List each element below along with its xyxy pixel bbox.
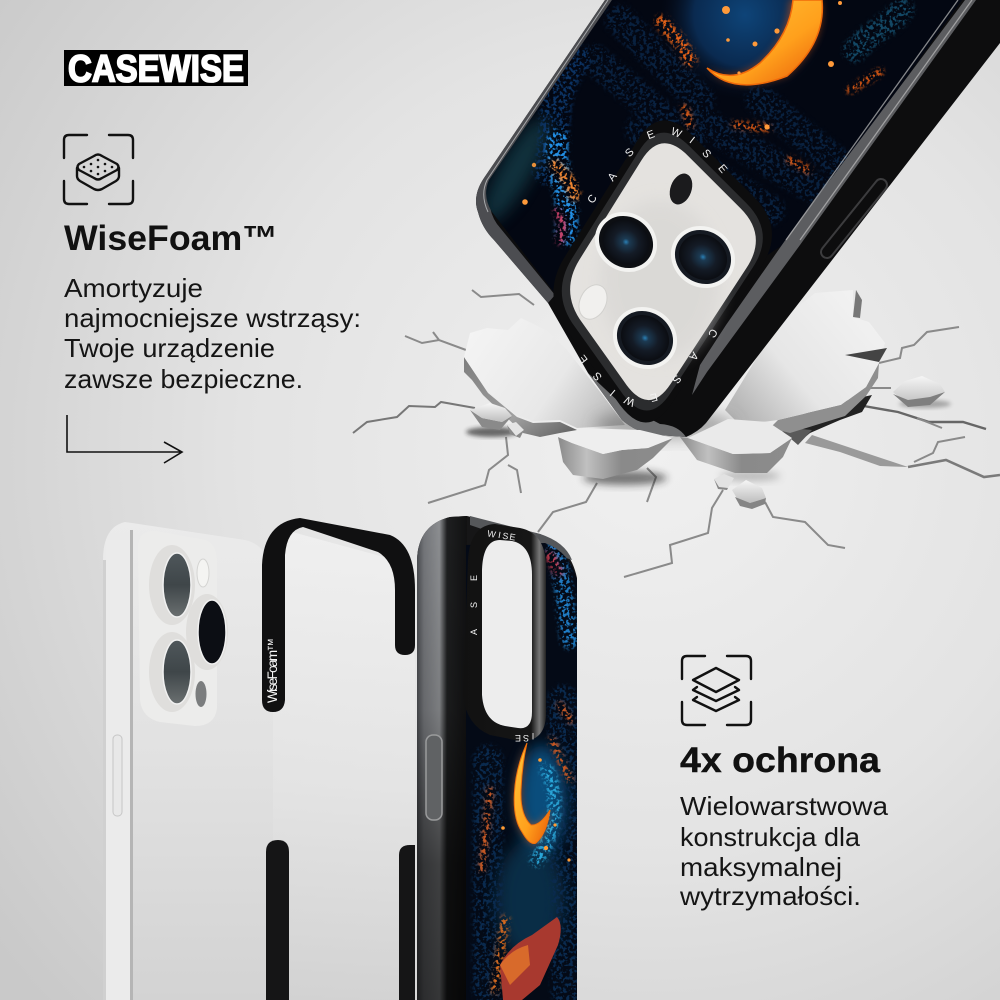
stars [501,758,571,862]
bezel lettering: A [606,170,620,184]
camera plateau [570,143,756,400]
ring lettering: I [532,731,534,741]
blue nebula [518,745,566,855]
lower bumper right [399,845,415,1000]
lens 2 [659,213,747,301]
side button [113,735,122,816]
heading: 4x ochrona: 4x ochrona [680,741,881,780]
side button [426,735,442,820]
teal glow [486,114,554,223]
ring lettering: S [469,602,479,608]
figure light [500,945,530,985]
flash [574,280,612,324]
ring lettering [469,528,534,743]
night sky [670,0,792,90]
bottom left: white phone back [103,522,273,1000]
band highlight [786,0,972,240]
sensor [666,170,696,208]
small chip [714,474,734,490]
moon glow [707,0,821,84]
bezel lettering: S [669,372,683,386]
text block: WiseFoam description: najmocniejsze wstrząsy: [64,303,361,333]
bezel lettering: I [608,387,618,398]
bumper label: WiseFoam™ [265,638,280,703]
bezel lettering: S [591,369,605,383]
rail edge [130,530,133,1000]
side rail [417,516,467,1000]
text block: WiseFoam description [64,273,361,394]
spike shard [853,290,862,318]
ring lettering: S [502,531,509,541]
crater: front fragments [558,419,792,509]
ring lettering: E [469,575,479,581]
shadow left fragment [583,471,667,485]
bezel lettering: E [645,128,656,142]
text block: WiseFoam description: zawsze bezpieczne. [64,364,303,394]
bezel lettering: S [623,146,637,160]
sleeper figure [500,917,561,1000]
left slab top [464,318,625,428]
right slab top [725,290,885,425]
rail darkening [417,516,467,1000]
ring lettering: I [497,530,502,540]
left grey bevel [476,0,612,303]
right fragment top [688,419,792,454]
phone body [103,522,273,1000]
lens mid [198,600,226,664]
lower right wedge [805,435,908,467]
right fragment side [680,437,792,473]
ring lettering: S [523,733,529,743]
text block: protection description: wytrzymałości. [679,881,861,911]
text block: protection description [679,791,889,911]
camera ring [463,524,546,741]
bezel lettering: W [669,126,684,141]
crescent moon [514,743,550,844]
volume button [827,185,881,252]
bezel lettering: E [649,390,659,404]
bezel lettering: I [687,135,697,146]
arrow [67,415,182,463]
camera plateau [138,531,217,726]
lens housings [149,545,228,712]
camera bezel [553,120,772,423]
cracks in wall [353,290,1000,577]
heading: WiseFoam: WiseFoam™ [64,219,278,258]
icon: layers in viewfinder [682,656,751,725]
camera opening [482,540,532,728]
bezel lettering: A [686,349,700,363]
shadow right fragment [720,471,780,481]
lens bottom [163,640,191,704]
lens 1 [583,200,669,284]
ring lettering: A [469,629,479,635]
lens 3 [601,294,689,382]
lower glow [496,840,564,960]
plateau shading [600,200,720,360]
left fragment top [558,428,673,454]
case shell [417,516,577,1000]
icon: foam in viewfinder [64,135,133,204]
flash [197,559,209,587]
bevel highlight [484,0,608,212]
bezel lettering: E [577,352,591,365]
brand logo: CASEWISE [68,48,244,90]
left slab trench [464,357,577,437]
crescent moon [707,0,822,85]
dark gap right [777,395,872,443]
bezel lettering: C [585,193,600,206]
lower bumper left [266,840,289,1000]
bezel lettering: C [705,326,720,340]
left fragment side [558,437,673,479]
text block: WiseFoam description: Twoje urządzenie [64,333,275,363]
text block: WiseFoam description: Amortyzuje [64,273,203,303]
bezel lettering: E [715,162,729,176]
ring lettering: E [515,733,521,743]
dark shard [845,348,887,362]
gap grey wall [775,425,812,445]
lens top [163,553,191,617]
screen artwork [486,0,962,291]
bezel ridge [562,133,763,411]
speckled foliage [548,10,902,240]
stars [522,1,842,205]
text block: protection description: Wielowarstwowa [680,791,889,821]
WiseFoam bumper [262,518,415,1000]
lower tip translucent [588,373,686,437]
top rim [470,516,572,560]
side rail [106,540,130,1000]
debris left [466,403,524,438]
speckle texture [482,550,570,990]
bezel lettering [577,126,729,408]
crater: rear slabs [464,290,951,467]
ring lettering: E [509,532,516,542]
bottom right: dark case [417,516,578,1000]
chip [732,480,766,509]
ring lettering: W [486,528,497,540]
soft contact shadow [595,412,735,438]
moon glow [514,743,550,844]
debris right [893,376,951,408]
screen artwork [466,530,578,1000]
grey side band [692,0,976,395]
bezel lettering: W [622,393,637,408]
text block: protection description: maksymalnej [680,852,842,882]
bumper interior [273,530,415,1000]
rail left line [103,560,106,1000]
case body [476,0,1000,437]
right slab side [770,363,879,433]
sensor [196,681,206,707]
top phone in dark case [470,0,1000,438]
text block: protection description: konstrukcja dla [680,822,861,852]
upper bumper [262,518,415,712]
bezel lettering: S [699,147,713,161]
